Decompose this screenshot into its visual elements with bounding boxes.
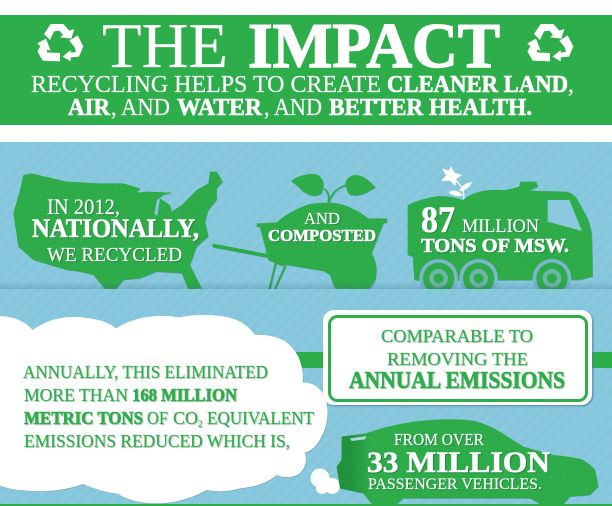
car rear shading bbox=[337, 422, 413, 504]
car bbox=[337, 419, 598, 504]
wheelbarrow text: AND bbox=[304, 209, 340, 228]
panel: recycled illustrations bbox=[0, 166, 612, 298]
subtitle: AIR bbox=[68, 95, 111, 121]
truck body bbox=[408, 182, 593, 281]
map text bbox=[32, 199, 200, 263]
map of the United States bbox=[13, 172, 223, 290]
title: THE bbox=[102, 11, 228, 81]
icon: recycling symbol left bbox=[37, 24, 83, 61]
truck text: TONS OF MSW. bbox=[421, 235, 569, 257]
wheelbarrow text bbox=[268, 212, 376, 242]
icon: white flower bbox=[441, 166, 472, 200]
cloud text bbox=[23, 362, 314, 451]
subtitle: WATER bbox=[177, 95, 263, 121]
truck window bbox=[548, 200, 582, 231]
subtitle: , bbox=[568, 72, 574, 98]
cloud text: EMISSIONS REDUCED WHICH IS, bbox=[24, 431, 290, 451]
icon: recycling symbol right bbox=[527, 24, 573, 61]
truck text bbox=[421, 207, 570, 254]
cloud text: EQUIVALENT bbox=[207, 408, 314, 428]
truck bbox=[408, 166, 593, 298]
subtitle: CLEANER LAND bbox=[387, 72, 568, 98]
cloud text: METRIC TONS bbox=[24, 408, 143, 428]
cloud shape bbox=[0, 315, 328, 503]
cloud bbox=[0, 315, 328, 503]
truck text: MILLION bbox=[462, 216, 539, 237]
leaf left bbox=[291, 174, 323, 196]
truck text: 87 bbox=[421, 200, 455, 241]
comparison callout box bbox=[323, 310, 592, 405]
blue background bbox=[0, 142, 612, 506]
car text: FROM OVER bbox=[394, 430, 485, 449]
wheelbarrow with plant bbox=[214, 174, 387, 292]
truck wheels bbox=[419, 259, 572, 289]
subtitle: BETTER HEALTH. bbox=[329, 95, 532, 121]
wheelbarrow text: COMPOSTED bbox=[268, 226, 376, 245]
callout text: ANNUAL EMISSIONS bbox=[349, 368, 565, 394]
green ribbon bbox=[290, 352, 612, 368]
callout text: REMOVING THE bbox=[387, 349, 528, 369]
title bbox=[102, 11, 500, 81]
wheelbarrow body bbox=[257, 203, 387, 292]
map text: NATIONALLY, bbox=[32, 214, 199, 243]
header banner bbox=[0, 11, 612, 125]
cloud text: OF bbox=[147, 408, 168, 428]
car text: 33 MILLION bbox=[367, 446, 550, 479]
car rear window bbox=[350, 436, 367, 441]
car text: PASSENGER VEHICLES. bbox=[368, 476, 542, 493]
callout text: COMPARABLE TO bbox=[381, 326, 533, 346]
cloud text: ANNUALLY, THIS ELIMINATED bbox=[23, 362, 268, 382]
subtitle: RECYCLING HELPS TO CREATE bbox=[31, 72, 381, 98]
cloud text: 2 bbox=[198, 419, 202, 429]
wheelbarrow handle and legs bbox=[214, 185, 347, 291]
cloud text: 168 MILLION bbox=[132, 385, 237, 405]
car exhaust smoke bbox=[310, 468, 340, 494]
map text: WE RECYCLED bbox=[47, 244, 182, 266]
subtitle: , AND bbox=[111, 95, 170, 121]
cloud text: CO bbox=[173, 408, 198, 428]
bottom green strip bbox=[0, 504, 612, 506]
callout text bbox=[349, 326, 565, 394]
subtitle: , AND bbox=[264, 95, 322, 121]
leaf right bbox=[346, 175, 376, 196]
subtitle bbox=[31, 72, 574, 121]
title: IMPACT bbox=[248, 11, 500, 81]
car text bbox=[367, 430, 550, 493]
map text: IN 2012, bbox=[47, 194, 120, 219]
car body bbox=[337, 419, 598, 504]
cloud text: MORE THAN bbox=[24, 385, 128, 405]
